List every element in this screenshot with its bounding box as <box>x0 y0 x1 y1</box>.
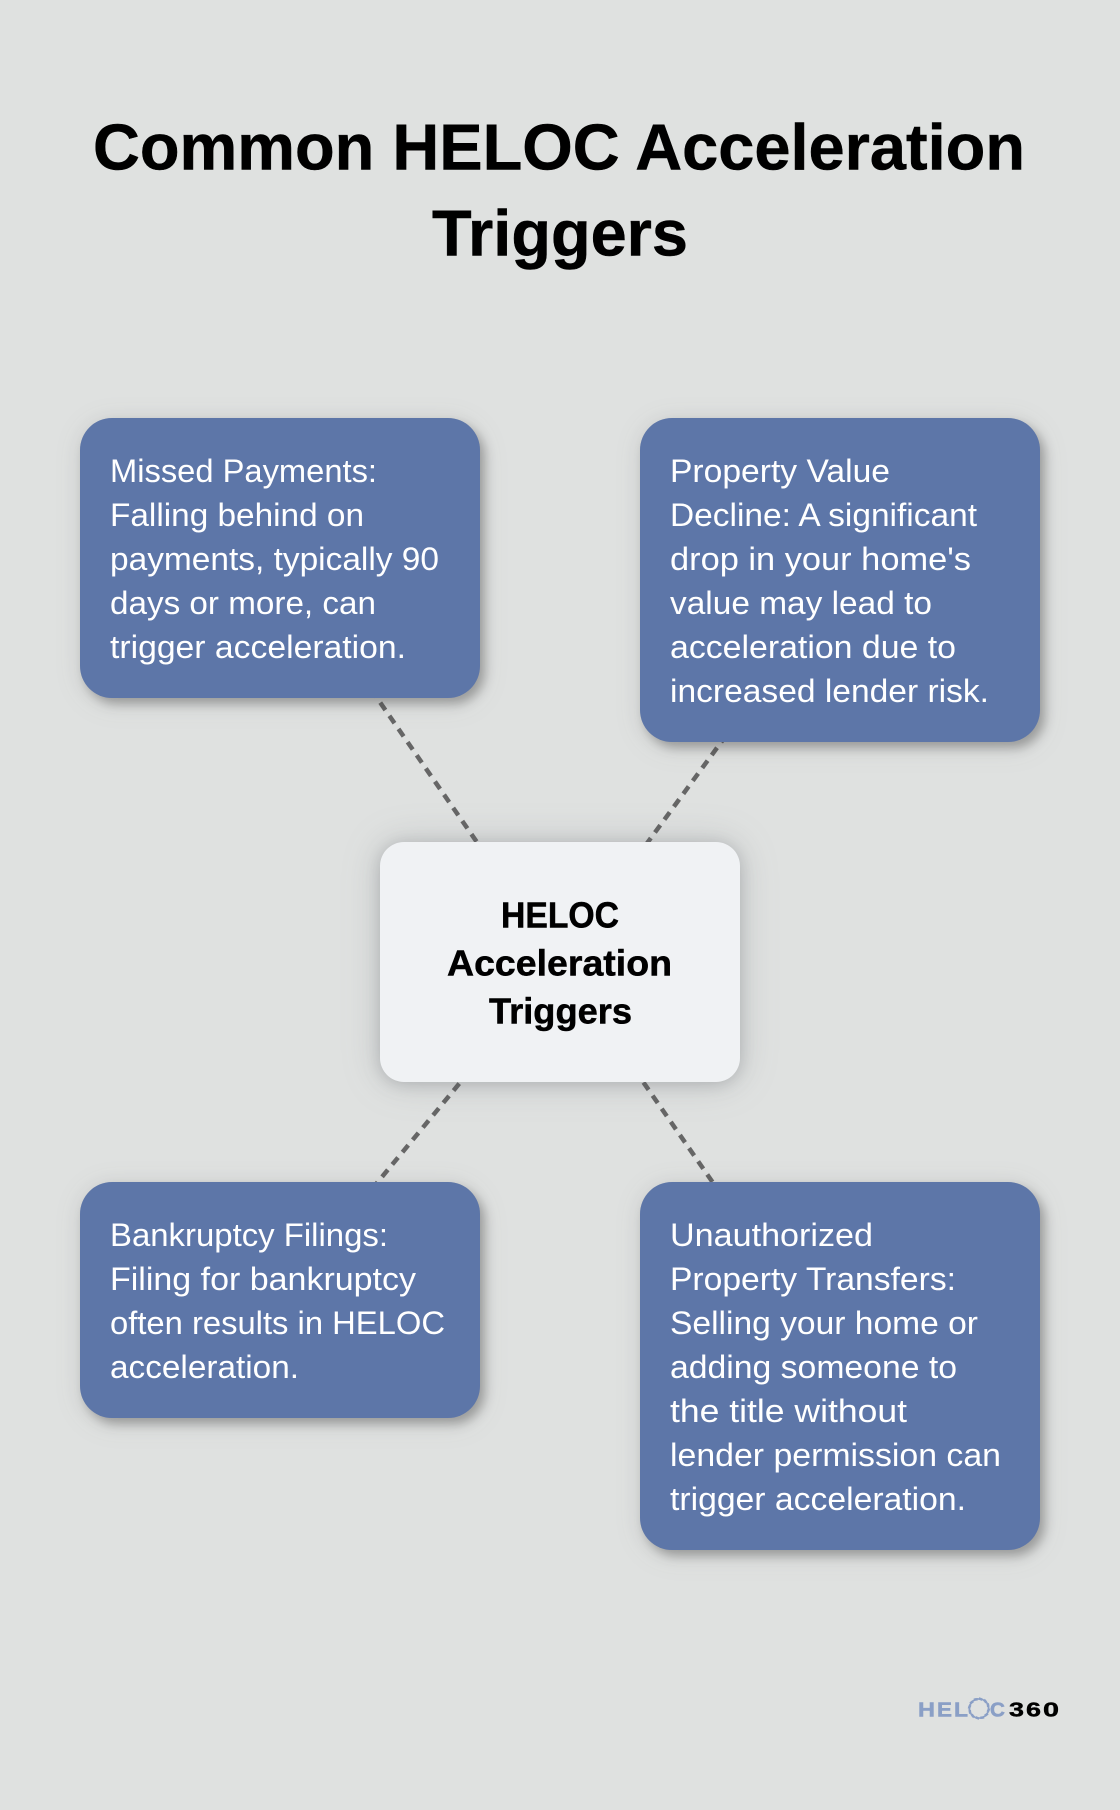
panel: property value decline: Decline: A significant <box>670 497 977 533</box>
panel: unauthorized property transfers: Unauthorized <box>670 1217 873 1253</box>
panel: missed payments: trigger acceleration. <box>110 629 406 665</box>
panel: center topic: Triggers <box>489 990 632 1031</box>
panel: missed payments: payments, typically 90 <box>110 541 439 577</box>
title: Common HELOC Acceleration <box>93 110 1025 184</box>
panel: property value decline: acceleration due to <box>670 629 956 665</box>
logo: HELOC360: E <box>937 1700 952 1722</box>
panel: property value decline: increased lender risk. <box>670 673 989 709</box>
panel: bankruptcy filings: Bankruptcy Filings: <box>110 1217 388 1253</box>
panel: center topic <box>380 842 740 1082</box>
title: Triggers <box>432 196 688 270</box>
logo: HELOC360: 6 <box>1026 1700 1041 1722</box>
panel: unauthorized property transfers: trigger acceleration. <box>670 1481 966 1517</box>
panel: bankruptcy filings <box>80 1182 480 1418</box>
dashed connectors <box>280 558 840 1366</box>
panel: missed payments: Falling behind on <box>110 497 364 533</box>
panel: unauthorized property transfers: adding someone to <box>670 1349 957 1385</box>
logo: HELOC360: 0 <box>1043 1700 1059 1722</box>
panel: unauthorized property transfers: Property Transfers: <box>670 1261 956 1297</box>
panel: bankruptcy filings: Filing for bankruptcy <box>110 1261 417 1297</box>
panel: unauthorized property transfers: lender permission can <box>670 1437 1001 1473</box>
panel: unauthorized property transfers: Selling your home or <box>670 1305 978 1341</box>
panel: missed payments: Missed Payments: <box>110 453 377 489</box>
panel: missed payments <box>80 418 480 698</box>
panel: bankruptcy filings: acceleration. <box>110 1349 299 1385</box>
panel: missed payments: days or more, can <box>110 585 376 621</box>
panel: center topic: HELOC <box>501 894 619 935</box>
logo: HELOC360: H <box>918 1700 935 1722</box>
panel: unauthorized property transfers <box>640 1182 1040 1550</box>
logo: HELOC360: 3 <box>1009 1700 1024 1722</box>
panel: bankruptcy filings: often results in HELOC <box>110 1305 445 1341</box>
logo: HELOC360: C <box>990 1700 1005 1722</box>
title <box>93 110 1025 270</box>
panel: property value decline: drop in your home's <box>670 541 971 577</box>
panel: property value decline: value may lead to <box>670 585 932 621</box>
logo: HELOC360: L <box>954 1700 968 1722</box>
panel: center topic: Acceleration <box>447 942 672 984</box>
panel: property value decline <box>640 418 1040 742</box>
panel: unauthorized property transfers: the title without <box>670 1393 907 1429</box>
panel: property value decline: Property Value <box>670 453 890 489</box>
logo: HELOC360 <box>918 1696 1059 1722</box>
